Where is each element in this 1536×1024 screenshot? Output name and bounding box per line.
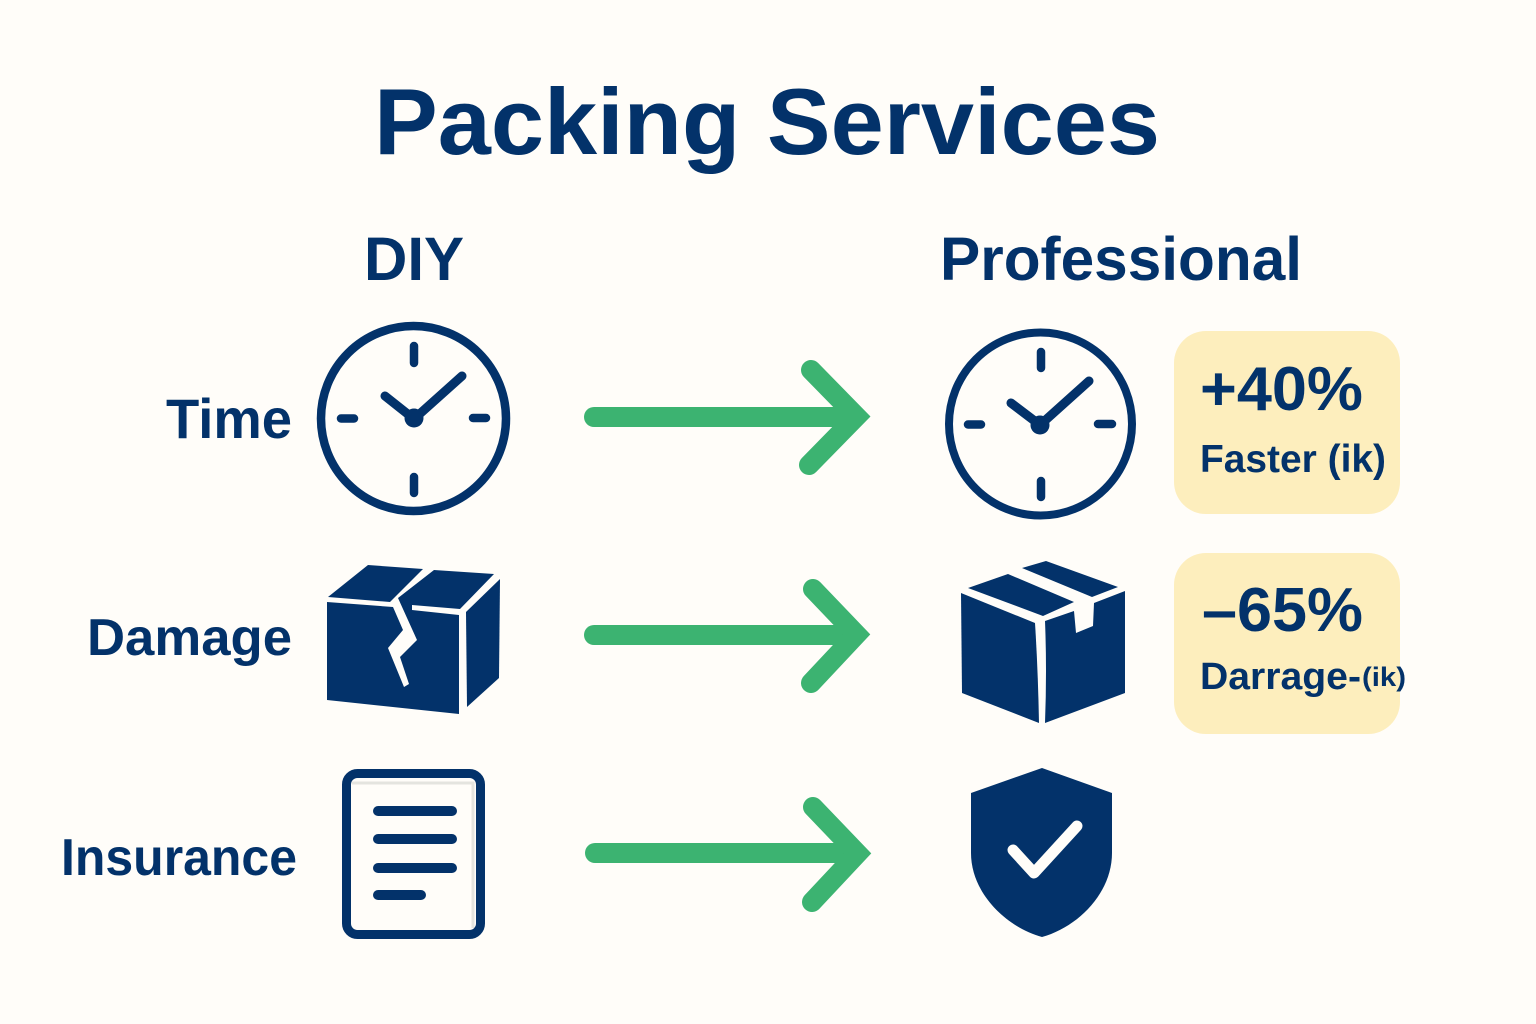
- label: Damage: Damage: [87, 609, 292, 667]
- icon: document: [346, 774, 480, 934]
- arrow: time: [594, 370, 856, 465]
- icon: shield with check: [971, 768, 1112, 937]
- heading: Professional: Professional: [940, 225, 1302, 293]
- callout: damage: [1174, 553, 1406, 734]
- title: Packing Services: [374, 69, 1160, 174]
- icon: intact box: [961, 561, 1125, 723]
- stat: +40%: +40%: [1200, 355, 1363, 424]
- stat label: faster: Faster (ik): [1200, 438, 1386, 481]
- stat label suffix: (ik): [1362, 662, 1406, 692]
- label: Time: Time: [166, 387, 292, 450]
- heading: DIY: DIY: [364, 225, 464, 293]
- stat: -65%: –65%: [1202, 576, 1363, 645]
- arrow: damage: [594, 589, 856, 683]
- callout: faster: [1174, 331, 1400, 514]
- label: Insurance: Insurance: [61, 829, 297, 887]
- arrow: insurance: [595, 807, 858, 902]
- stat label: damage: Darrage-: [1200, 656, 1361, 698]
- icon: damaged box: [327, 565, 500, 714]
- icon: DIY clock: [321, 326, 506, 511]
- icon: Professional clock: [949, 332, 1132, 516]
